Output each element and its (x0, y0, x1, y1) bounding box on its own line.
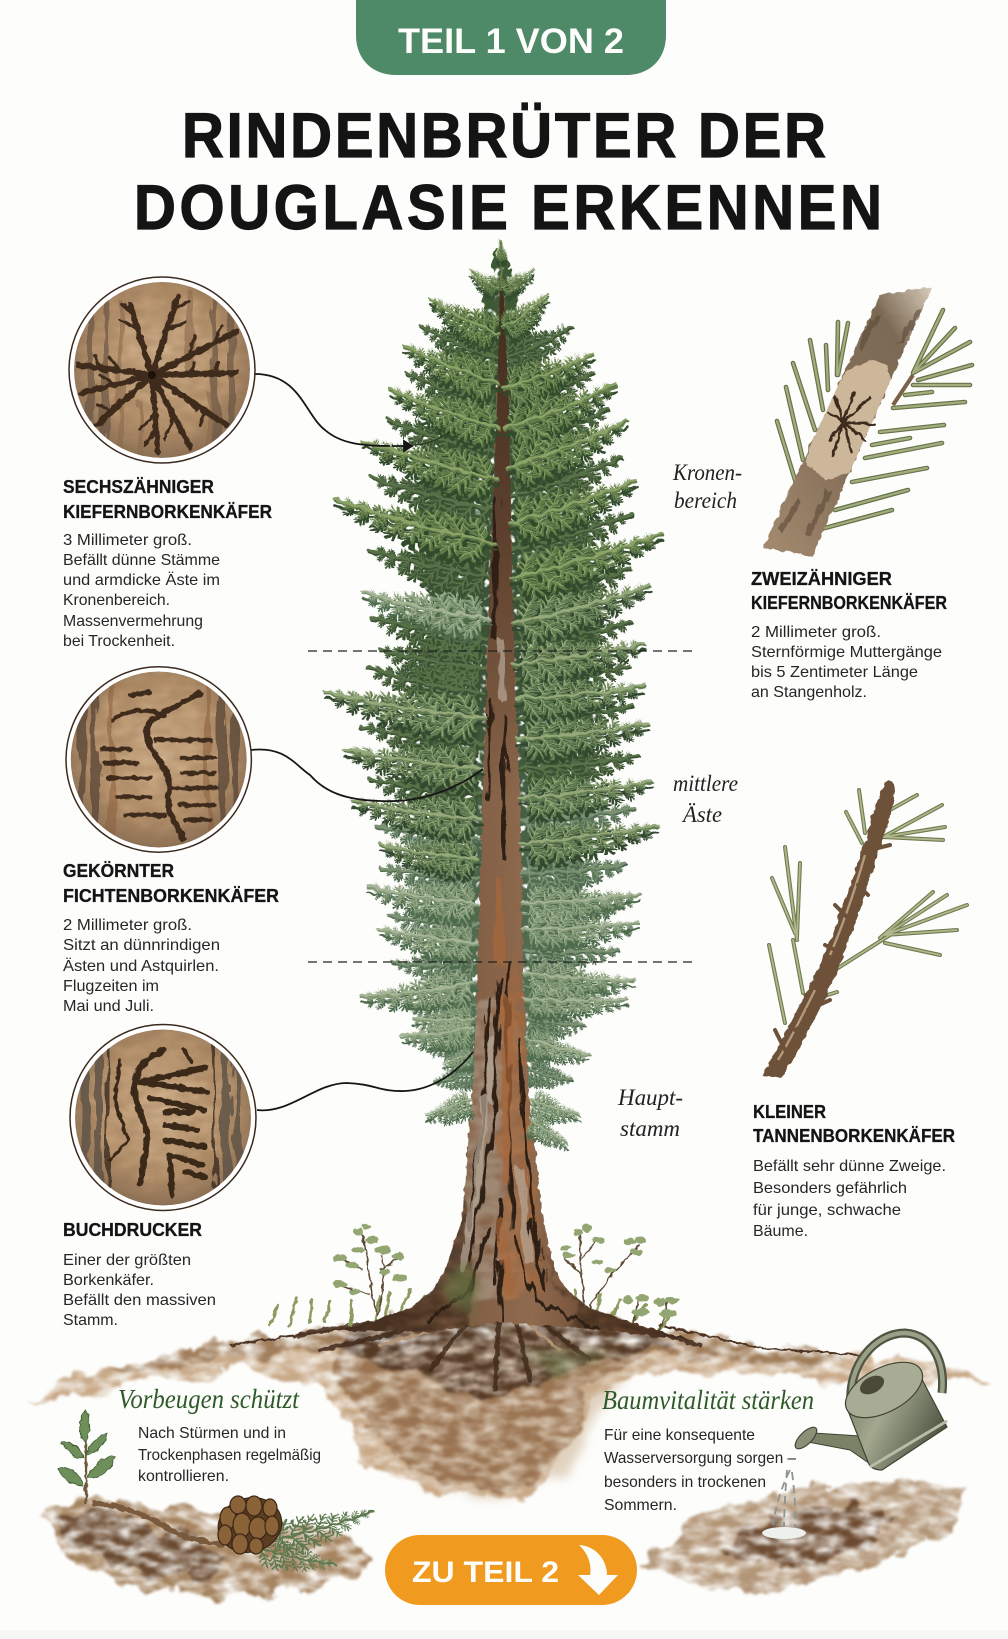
text: Für eine konsequente (604, 1427, 755, 1444)
heading: Baumvitalität stärken (602, 1385, 814, 1415)
back fronds (357, 306, 642, 1100)
watering can (792, 1333, 947, 1470)
zone label: mittlere Äste: mittlere (673, 771, 738, 796)
heading and text: Kleiner Tannenborkenkäfer: TANNENBORKENKÄFER (753, 1125, 955, 1146)
soil patch right (644, 1478, 970, 1590)
medallion: Buchdrucker galleries (70, 1024, 256, 1210)
dashed zone dividers (308, 651, 697, 962)
fronds top zone (328, 238, 669, 610)
heading and text: Buchdrucker: BUCHDRUCKER (63, 1219, 202, 1240)
icon: curved arrow (578, 1545, 618, 1595)
ground: soil and roots (30, 1305, 987, 1500)
upper trunk shading (484, 280, 518, 760)
medallion: ladder galleries (66, 667, 251, 853)
zone label: mittlere Äste (673, 771, 738, 827)
heading and text: Sechszähniger Kiefernborkenkäfer: und armdicke Äste im (63, 571, 220, 589)
panel: Vorbeugen schützt (35, 1384, 379, 1597)
heading and text: Zweizähniger Kiefernborkenkäfer: KIEFERNBORKENKÄFER (751, 592, 947, 613)
trunk (340, 280, 690, 1340)
pine cone (212, 1491, 288, 1559)
heading and text: Sechszähniger Kiefernborkenkäfer: Befällt dünne Stämme (63, 552, 220, 569)
zone label: Hauptstamm: stamm (620, 1116, 680, 1141)
text: Wasserversorgung sorgen – (604, 1450, 796, 1467)
heading and text: Gekörnter Fichtenborkenkäfer: Sitzt an dünnrindigen (63, 937, 220, 954)
ground plants: bushes and grass (270, 1223, 679, 1332)
text: kontrollieren. (138, 1468, 229, 1485)
text: Nach Stürmen und in (138, 1425, 286, 1442)
pine sprigs (253, 1495, 379, 1586)
heading and text: Sechszähniger Kiefernborkenkäfer (63, 476, 272, 650)
heading and text: Gekörnter Fichtenborkenkäfer (63, 860, 279, 1015)
text: besonders in trockenen (604, 1474, 766, 1491)
root (92, 1503, 225, 1545)
heading and text: Gekörnter Fichtenborkenkäfer: 2 Millimeter groß. (63, 917, 192, 934)
heading and text: Zweizähniger Kiefernborkenkäfer: Sternförmige Muttergänge (751, 644, 942, 661)
heading and text: Kleiner Tannenborkenkäfer (753, 1101, 955, 1240)
heading and text: Gekörnter Fichtenborkenkäfer: GEKÖRNTER (63, 860, 174, 881)
bark detail (350, 500, 650, 1330)
water stream (762, 1470, 806, 1539)
heading and text: Sechszähniger Kiefernborkenkäfer: KIEFERNBORKENKÄFER (63, 501, 272, 522)
heading: Vorbeugen schützt (118, 1384, 300, 1414)
text (138, 1425, 321, 1485)
heading and text: Buchdrucker: Borkenkäfer. (63, 1272, 154, 1289)
illustration: thick branch with star gallery (763, 287, 972, 557)
heading and text: Zweizähniger Kiefernborkenkäfer (751, 568, 947, 701)
heading and text: Buchdrucker: Einer der größten (63, 1252, 191, 1269)
callout line 3 (257, 1052, 473, 1110)
illustration: thin twig (762, 782, 967, 1078)
footer strip (0, 1630, 1008, 1639)
heading and text: Kleiner Tannenborkenkäfer: Besonders gefährlich (753, 1180, 907, 1197)
heading and text: Zweizähniger Kiefernborkenkäfer: ZWEIZÄHNIGER (751, 568, 892, 589)
heading and text: Gekörnter Fichtenborkenkäfer: Ästen und Astquirlen. (63, 957, 219, 975)
heading and text: Sechszähniger Kiefernborkenkäfer: 3 Millimeter groß. (63, 532, 192, 549)
zone label: Kronenbereich (672, 460, 742, 513)
button: Zu Teil 2 (385, 1535, 637, 1605)
tree: crown and trunk (321, 238, 690, 1340)
zone label: mittlere Äste: Äste (681, 802, 722, 827)
heading and text: Sechszähniger Kiefernborkenkäfer: SECHSZÄHNIGER (63, 476, 214, 497)
zone label: Kronenbereich: bereich (674, 488, 737, 513)
medallion: star galleries (69, 277, 255, 463)
heading and text: Buchdrucker: Befällt den massiven (63, 1292, 216, 1309)
heading and text: Sechszähniger Kiefernborkenkäfer: bei Trockenheit. (63, 633, 175, 650)
text: Sommern. (604, 1497, 677, 1514)
heading and text: Kleiner Tannenborkenkäfer: Befällt sehr dünne Zweige. (753, 1158, 946, 1175)
badge: Teil 1 von 2: TEIL 1 VON 2 (398, 22, 624, 61)
title: DOUGLASIE ERKENNEN (134, 172, 882, 243)
text: Trockenphasen regelmäßig (138, 1447, 321, 1464)
sapling (58, 1410, 116, 1503)
zone label: Hauptstamm: Haupt- (617, 1085, 683, 1110)
heading and text: Zweizähniger Kiefernborkenkäfer: an Stangenholz. (751, 684, 867, 701)
leader shoot (500, 240, 502, 290)
heading and text: Kleiner Tannenborkenkäfer: Bäume. (753, 1223, 808, 1240)
button: Zu Teil 2: ZU TEIL 2 (412, 1556, 559, 1589)
callout line 2 (251, 749, 483, 801)
callout arrow 1 (255, 374, 450, 451)
heading and text: Sechszähniger Kiefernborkenkäfer: Massenvermehrung (63, 613, 203, 630)
heading and text: Zweizähniger Kiefernborkenkäfer: bis 5 Zentimeter Länge (751, 664, 918, 681)
soil patch left (35, 1500, 370, 1597)
panel: Baumvitalität stärken (602, 1333, 970, 1590)
crown mass (418, 250, 596, 1100)
heading and text: Zweizähniger Kiefernborkenkäfer: 2 Millimeter groß. (751, 624, 881, 641)
heading and text: Gekörnter Fichtenborkenkäfer: Flugzeiten im (63, 978, 159, 995)
zone label: Hauptstamm (617, 1085, 683, 1141)
heading and text: Gekörnter Fichtenborkenkäfer: Mai und Juli. (63, 998, 154, 1015)
heading and text: Gekörnter Fichtenborkenkäfer: FICHTENBORKENKÄFER (63, 885, 279, 906)
fronds mid zone (321, 565, 661, 887)
title: RINDENBRÜTER DER (182, 100, 826, 171)
heading and text: Kleiner Tannenborkenkäfer: KLEINER (753, 1101, 826, 1122)
zone label: Kronenbereich: Kronen- (672, 460, 742, 485)
title (134, 100, 882, 243)
text (604, 1427, 796, 1514)
heading and text: Sechszähniger Kiefernborkenkäfer: Kronenbereich. (63, 592, 170, 609)
heading and text: Kleiner Tannenborkenkäfer: für junge, schwache (753, 1202, 901, 1219)
fronds low zone (357, 573, 641, 1162)
badge: Teil 1 von 2 (356, 0, 666, 75)
heading and text: Buchdrucker: Stamm. (63, 1312, 118, 1329)
heading and text: Buchdrucker (63, 1219, 216, 1329)
